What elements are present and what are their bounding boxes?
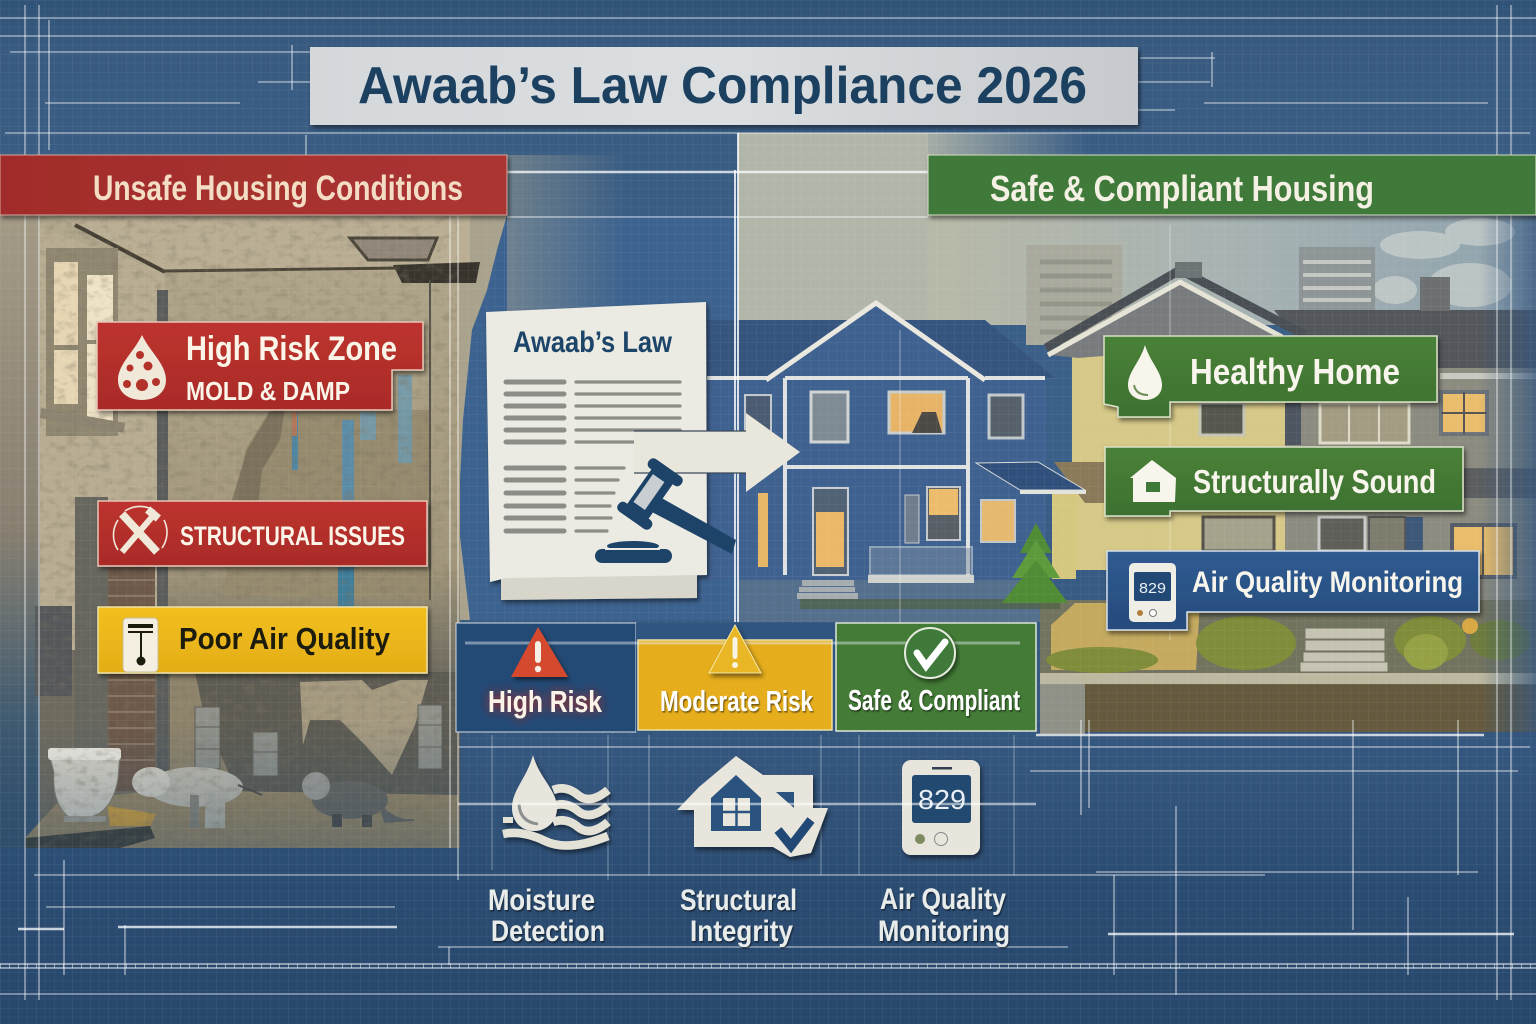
heading: safe housing <box>928 155 1536 215</box>
plaster edge and debris <box>452 215 507 620</box>
label text: Healthy Home <box>1190 351 1400 392</box>
status text: high risk: High Risk <box>488 684 603 719</box>
label text: STRUCTURAL ISSUES <box>180 521 405 551</box>
icon: water drop <box>1128 345 1162 400</box>
porch roofs <box>1054 462 1104 503</box>
water stains <box>292 375 412 608</box>
icon: air quality monitor: 829 <box>918 784 966 815</box>
status text: compliant: Safe & Compliant <box>848 685 1020 717</box>
icon: gavel <box>595 456 736 563</box>
text: moisture detection: Detection <box>491 915 605 948</box>
wall tiles <box>195 705 442 776</box>
label: high risk zone <box>97 322 423 410</box>
windows <box>745 392 1023 575</box>
text: air quality monitoring: Air Quality <box>880 883 1006 916</box>
label text: Structurally Sound <box>1193 463 1436 500</box>
floor <box>25 790 458 848</box>
peeled wall area <box>222 410 432 600</box>
arrow: law to compliant housing <box>634 413 800 492</box>
status: moderate fill <box>638 640 832 730</box>
text: structural integrity <box>680 884 797 948</box>
left wall <box>40 228 165 830</box>
animal: light creature <box>132 767 262 828</box>
retaining wall <box>1040 673 1536 684</box>
document heading: Awaab’s Law <box>513 326 673 359</box>
document text lines <box>506 382 680 531</box>
text: moisture detection <box>488 884 605 948</box>
trim <box>707 378 1045 575</box>
gable <box>766 303 985 380</box>
panel: safe housing scene backdrop <box>738 133 1536 622</box>
cloud shapes <box>1373 218 1515 307</box>
illustration: neighbouring yellow house <box>1040 215 1536 740</box>
back wall <box>40 215 460 848</box>
icon: monitor device <box>1129 563 1176 622</box>
pipe <box>157 290 168 790</box>
label text: High Risk Zone <box>186 330 397 368</box>
house windows <box>1200 392 1515 577</box>
porch rail <box>868 547 974 583</box>
icon: moderate warning <box>709 625 761 673</box>
label text: Poor Air Quality <box>179 621 391 656</box>
gavel block <box>595 541 672 563</box>
ceiling <box>40 215 470 272</box>
label text: Air Quality Monitoring <box>1192 566 1463 599</box>
text: structural integrity: Structural <box>680 884 797 917</box>
icon: air gauge <box>123 618 158 672</box>
grunge texture <box>40 215 458 848</box>
text: air quality monitoring <box>878 883 1010 948</box>
electrical box <box>35 606 72 696</box>
icon: house <box>1130 460 1176 502</box>
label: structural issues <box>98 501 427 566</box>
heading text: Unsafe Housing Conditions <box>93 169 463 208</box>
status text: moderate risk: Moderate Risk <box>660 686 814 718</box>
icon: monitor device: 829 <box>1139 580 1166 597</box>
front steps <box>797 580 858 599</box>
icon: crossed tools <box>113 506 167 552</box>
title banner <box>310 47 1138 125</box>
yard <box>1040 600 1536 675</box>
window <box>40 248 125 436</box>
status: green fill <box>836 623 1036 731</box>
icon: mold drop <box>118 335 166 400</box>
guide line across icon row <box>458 803 1036 805</box>
panel: unsafe room scene <box>0 215 507 848</box>
shrub tree <box>1002 523 1068 603</box>
panel: risk status band <box>456 623 1036 732</box>
icon: air quality monitor <box>902 760 980 855</box>
right roof <box>1274 310 1536 368</box>
porch roof <box>976 462 1085 490</box>
heading text: Safe & Compliant Housing <box>990 168 1374 209</box>
label: poor air quality <box>98 607 427 673</box>
door <box>75 497 108 749</box>
label: air quality monitoring <box>1107 551 1479 630</box>
brick column <box>108 566 155 791</box>
apartment tower right <box>1299 247 1375 311</box>
animal: grey rodent <box>302 772 414 827</box>
shrubs <box>1046 616 1530 673</box>
steps <box>1300 628 1388 672</box>
text: moisture detection: Moisture <box>488 884 595 917</box>
label: healthy home <box>1104 336 1437 417</box>
icon: high risk warning <box>511 627 568 677</box>
lower dark wall <box>170 672 460 797</box>
roof <box>707 320 1055 378</box>
illustration: blue house <box>707 303 1086 609</box>
icon: compliant check <box>905 628 955 678</box>
text: structural integrity: Integrity <box>690 915 793 948</box>
title: Awaab’s Law Compliance 2026 <box>358 57 1087 115</box>
label subtext: MOLD & DAMP <box>186 376 350 406</box>
icon: moisture detection <box>503 755 608 845</box>
gable <box>1050 279 1283 358</box>
icon: structural integrity <box>677 756 828 857</box>
document: Awaab's Law <box>486 302 707 600</box>
apartment tower left <box>1026 245 1122 345</box>
heading: unsafe housing <box>0 155 507 215</box>
label: structurally sound <box>1105 447 1463 516</box>
bathtub <box>48 748 121 822</box>
text: air quality monitoring: Monitoring <box>878 915 1010 948</box>
status band guide line <box>465 642 1020 644</box>
